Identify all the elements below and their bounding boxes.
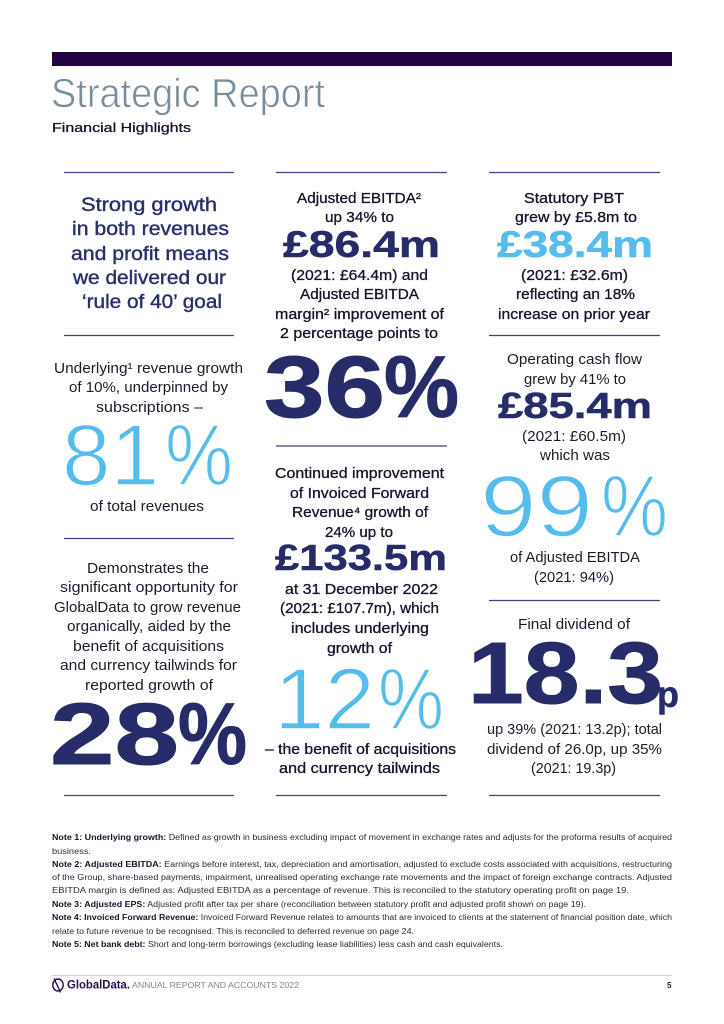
stat: 36%: % — [384, 339, 459, 436]
stat: 18.3p: 18.3 — [468, 625, 663, 722]
stat: £38.4m: £38.4m — [497, 224, 653, 265]
panel: invoiced forward revenue: and currency tailwinds — [279, 761, 440, 777]
panel: final dividend: (2021: 19.3p) — [531, 761, 616, 777]
title: Strategic Report — [51, 70, 326, 116]
stat: 99%: 99 — [480, 458, 593, 555]
panel: statutory PBT: Statutory PBT — [524, 191, 624, 207]
footnotes: Note 1: Underlying growth: Defined as growth in business excluding impact of movement in exchange rates and adjusts for the proforma results of acquired — [52, 833, 672, 842]
icon: GlobalData logo — [53, 978, 63, 992]
footnotes: Note 2: Adjusted EBITDA: Earnings before interest, tax, depreciation and amortisation, adjusted to exclude costs associated with acquisitions, restructuring — [52, 860, 672, 869]
report name: ANNUAL REPORT AND ACCOUNTS 2022 — [132, 980, 299, 990]
panel: underlying revenue growth — [54, 361, 243, 515]
footnotes: Note 5: Net bank debt: Short and long-term borrowings (excluding lease liabilities) less cash and cash equivalents. — [52, 940, 503, 949]
footnotes — [52, 833, 672, 949]
footnotes: of the Group, share-based payments, impairment, unrealised operating exchange rate movements and the impact of foreign exchange contracts. Adjusted — [52, 873, 672, 882]
panel: final dividend: Final dividend of — [518, 617, 631, 633]
stat: 12% — [274, 651, 444, 748]
footnotes: Note 3: Adjusted EPS: Adjusted profit after tax per share (reconciliation between statutory profit and adjusted profit shown on page 19). — [52, 900, 586, 909]
stat: 36%: 36 — [264, 339, 385, 436]
logo wordmark: GlobalData. — [67, 980, 130, 992]
panel: rule of 40 statement: Strong growth — [81, 194, 217, 216]
stat: 28%: % — [178, 686, 247, 783]
panel: invoiced forward revenue: includes underlying — [291, 621, 429, 637]
stat: 81% — [62, 407, 233, 504]
panel: statutory PBT: (2021: £32.6m) — [521, 268, 628, 284]
panel: operating cash flow: which was — [539, 448, 610, 464]
panel: adjusted EBITDA: 2 percentage points to — [280, 326, 438, 342]
stat: 28% — [50, 686, 247, 783]
panel: invoiced forward revenue: Revenue⁴ growth of — [292, 505, 429, 521]
stat: £86.4m: £86.4m — [283, 224, 440, 265]
stat: 18.3p: p — [657, 674, 679, 715]
panel: invoiced forward revenue: (2021: £107.7m), which — [280, 601, 439, 617]
stat: £133.5m: £133.5m — [275, 537, 447, 578]
panel: statutory PBT: grew by £5.8m to — [515, 210, 637, 226]
panel: invoiced forward revenue: at 31 December 2022 — [285, 582, 438, 598]
panel: reported growth: and currency tailwinds for — [60, 658, 237, 674]
panel: rule of 40 statement: ‘rule of 40’ goal — [82, 291, 222, 313]
panel: adjusted EBITDA: up 34% to — [325, 210, 394, 226]
panel: rule of 40 statement — [71, 194, 229, 313]
panel: adjusted EBITDA: margin² improvement of — [275, 307, 445, 323]
panel: reported growth: GlobalData to grow revenue — [54, 600, 241, 616]
panel: operating cash flow: (2021: 94%) — [534, 570, 614, 586]
panel: reported growth: reported growth of — [85, 678, 214, 694]
panel: underlying revenue growth: Underlying¹ revenue growth — [54, 361, 243, 377]
footnotes: Note 4: Invoiced Forward Revenue: Invoiced Forward Revenue relates to amounts that are invoiced to clients at the statement of financial position date, which — [52, 913, 672, 922]
footnotes: business. — [52, 847, 91, 856]
panel: rule of 40 statement: in both revenues — [72, 218, 229, 240]
panel: invoiced forward revenue: 24% up to — [325, 525, 393, 541]
panel: invoiced forward revenue: – the benefit of acquisitions — [265, 742, 456, 758]
stat: 12%: 12 — [274, 651, 375, 748]
panel: final dividend — [468, 617, 679, 777]
stat: 99%: % — [601, 458, 668, 555]
header bar — [52, 52, 672, 66]
stat: 99% — [480, 458, 668, 555]
panel: underlying revenue growth: of total revenues — [90, 499, 204, 515]
footnotes: EBITDA margin is defined as: Adjusted EBITDA as a percentage of revenue. This is reconciled to the statutory operating profit on page 19. — [52, 886, 629, 895]
panel: statutory PBT — [497, 191, 653, 323]
panel: operating cash flow — [480, 352, 668, 586]
stat: 28%: 28 — [50, 686, 179, 783]
stat: 81%: 81 — [62, 407, 159, 504]
stat: 81%: % — [165, 407, 233, 504]
panel: operating cash flow: Operating cash flow — [507, 352, 643, 368]
footer — [52, 976, 672, 992]
panel: operating cash flow: (2021: £60.5m) — [522, 429, 626, 445]
panel: adjusted EBITDA: (2021: £64.4m) and — [291, 268, 428, 284]
panel: reported growth: Demonstrates the — [87, 561, 209, 577]
panel: final dividend: up 39% (2021: 13.2p); total — [487, 722, 662, 738]
panel: statutory PBT: reflecting an 18% — [516, 287, 635, 303]
panel: statutory PBT: increase on prior year — [498, 307, 650, 323]
panel: invoiced forward revenue: Continued improvement — [275, 466, 444, 482]
panel: operating cash flow: of Adjusted EBITDA — [510, 550, 640, 566]
subtitle: Financial Highlights — [52, 120, 192, 135]
panel: reported growth — [50, 561, 247, 783]
panel: adjusted EBITDA: Adjusted EBITDA² — [297, 191, 421, 207]
panel: adjusted EBITDA: Adjusted EBITDA — [300, 287, 419, 303]
stat: 12%: % — [378, 651, 444, 748]
panel: final dividend: dividend of 26.0p, up 35% — [487, 742, 662, 758]
panel: underlying revenue growth: of 10%, underpinned by — [69, 380, 229, 396]
panel: underlying revenue growth: subscriptions – — [96, 400, 204, 416]
panel: reported growth: significant opportunity for — [60, 580, 238, 596]
panel: invoiced forward revenue: growth of — [327, 641, 393, 657]
panel: reported growth: organically, aided by the — [67, 619, 231, 635]
page number: 5 — [667, 981, 672, 990]
panel: operating cash flow: grew by 41% to — [524, 372, 626, 388]
panel: rule of 40 statement: and profit means — [71, 243, 229, 265]
panel: reported growth: benefit of acquisitions — [73, 639, 224, 655]
stat: £85.4m: £85.4m — [498, 385, 652, 426]
panel: adjusted EBITDA — [264, 191, 459, 436]
panel: rule of 40 statement: we delivered our — [72, 267, 227, 289]
panel: invoiced forward revenue: of Invoiced Forward — [290, 486, 429, 502]
panel: invoiced forward revenue — [265, 466, 456, 777]
footnotes: relate to future revenue to be recognised. This is reconciled to deferred revenue on page 24. — [52, 927, 414, 936]
stat: 36% — [264, 339, 459, 436]
